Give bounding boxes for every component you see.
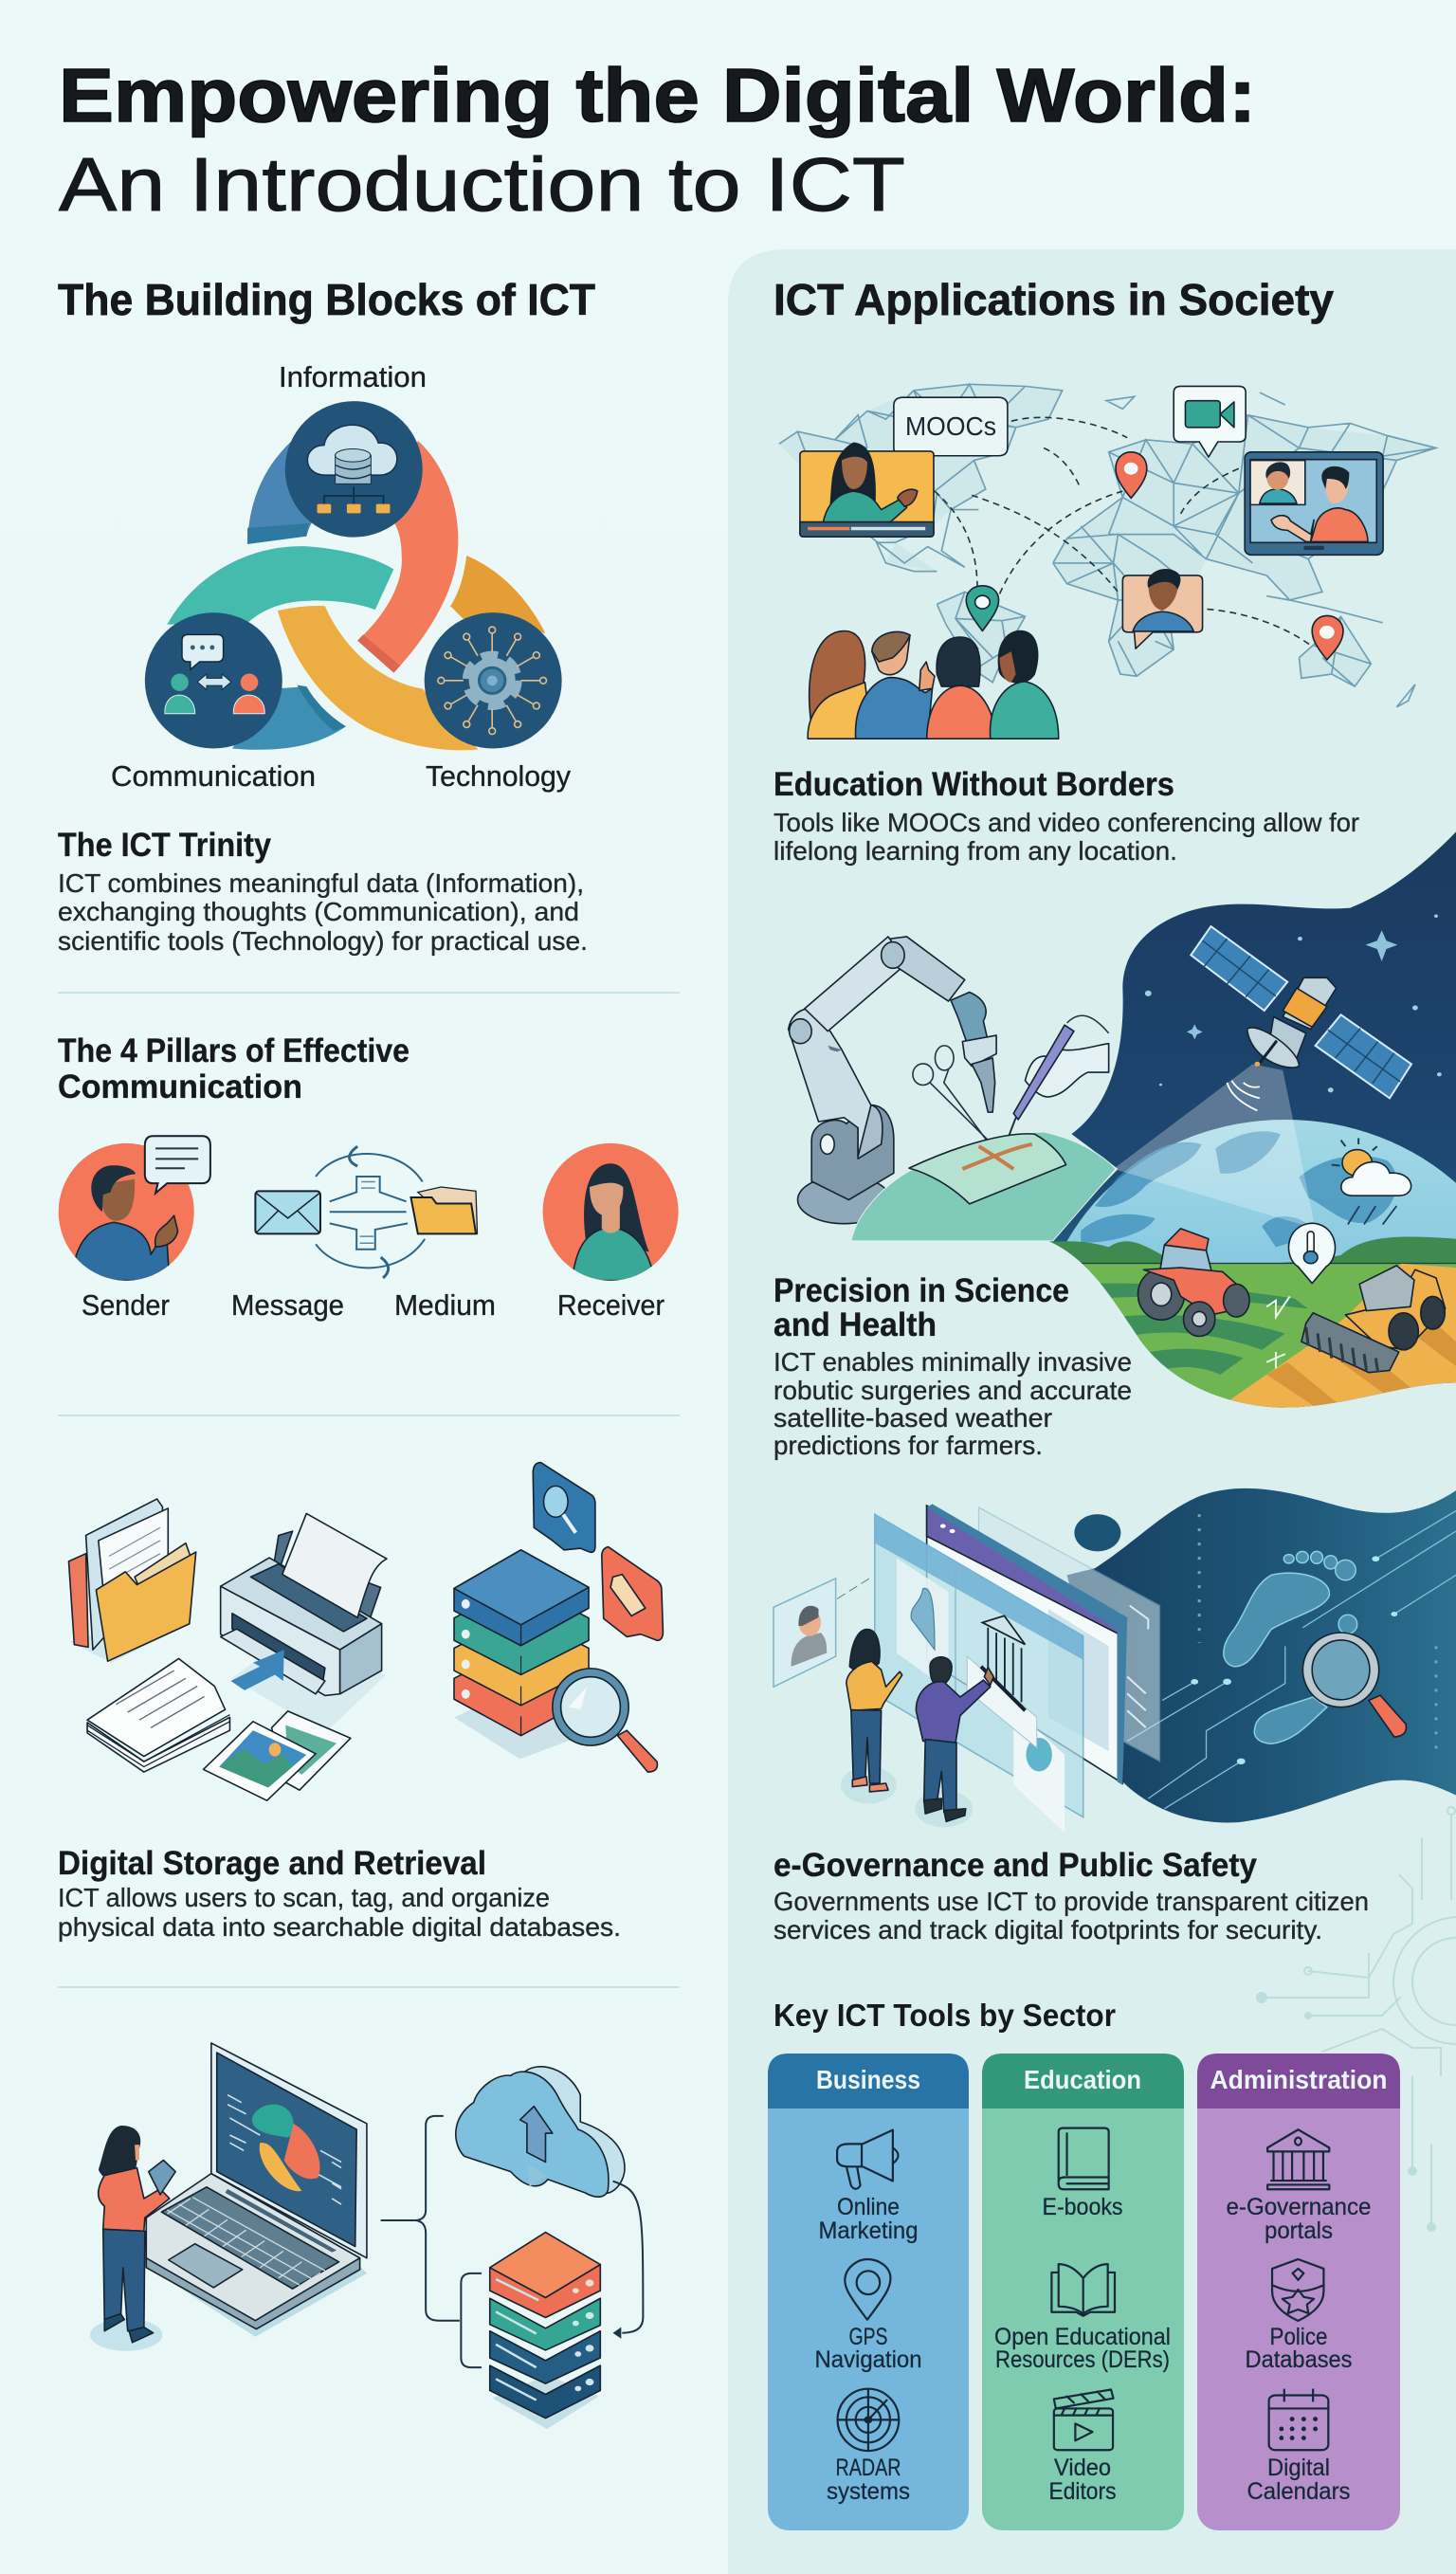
text block: precision in science and health: ICT enables minimally invasive (774, 1347, 1132, 1377)
decoration: stars (1187, 930, 1397, 1039)
card: Education: Resources (DERs) (995, 2346, 1170, 2373)
connector: bracket lines (381, 2116, 482, 2367)
label: MOOCs: MOOCs (905, 411, 996, 441)
icon: cloud upload (456, 2067, 625, 2197)
card: Administration: Calendars (1247, 2478, 1350, 2505)
card: Administration: Administration (1210, 2065, 1388, 2094)
labels: four pillars: Message (231, 1288, 344, 1322)
text block: digital storage: physical data into searchable digital databases. (58, 1912, 621, 1942)
icon: presenter bubble (1122, 569, 1203, 648)
icon: e-book (1059, 2128, 1109, 2189)
card: Administration (1197, 2054, 1400, 2530)
diagram: ICT trinity (145, 401, 562, 750)
text block: precision in science and health: Precision in Science (774, 1272, 1069, 1309)
illustration: education world map (779, 384, 1436, 739)
icon: location pins (966, 452, 1343, 660)
text block: precision in science and health: satellite-based weather (774, 1403, 1052, 1433)
icon: man (915, 1657, 993, 1827)
background blob: space, earth and farm (1048, 832, 1456, 1408)
labels: four pillars: Sender (82, 1288, 170, 1322)
heading: building blocks: The Building Blocks of ICT (58, 275, 595, 324)
icon: teacher screen (800, 442, 934, 537)
text block: ICT Trinity: exchanging thoughts (Communication), and (58, 897, 579, 926)
illustration: precision science and health (787, 832, 1456, 1408)
text block: education without borders: lifelong learning from any location. (774, 836, 1177, 866)
card: Administration: e-Governance (1227, 2194, 1371, 2220)
illustration: folders, printer, documents (68, 1499, 387, 1800)
icon: government building (981, 1616, 1025, 1710)
icon: open book (1051, 2264, 1115, 2316)
card: Administration: Police (1270, 2324, 1327, 2350)
card: Education: Editors (1048, 2478, 1117, 2505)
card: Business (768, 2054, 969, 2530)
card: Education: Video (1054, 2455, 1111, 2481)
labels: four pillars: Receiver (557, 1288, 664, 1322)
text block: ICT Trinity: ICT combines meaningful data (Information), (58, 868, 584, 898)
card: Administration: Databases (1246, 2346, 1352, 2373)
icon: thermometer pin (1288, 1223, 1336, 1284)
text block: precision in science and health (774, 1272, 1132, 1460)
text block: digital storage: ICT allows users to scan, tag, and organize (58, 1883, 550, 1912)
illustration: laptop, cloud and servers (90, 2043, 643, 2429)
illustration: e-governance and digital footprints (774, 1488, 1456, 1833)
label: Communication: Communication (111, 759, 316, 793)
icon: police shield (1272, 2259, 1323, 2321)
text block: e-governance and public safety: services and track digital footprints for security. (774, 1915, 1322, 1944)
icon: surgical scissors (913, 1046, 988, 1142)
chart: wireframe world map (779, 384, 1436, 707)
card: Business: systems (827, 2478, 910, 2505)
text block: ICT Trinity (58, 827, 588, 956)
icon: gloved hand with pen (1006, 1015, 1109, 1144)
card: Education (982, 2054, 1184, 2530)
text block: ICT Trinity: The ICT Trinity (58, 827, 271, 864)
icon: radar (838, 2389, 899, 2451)
text block: e-governance and public safety (774, 1847, 1369, 1944)
icon: receiver (543, 1143, 679, 1281)
icon: sender (59, 1136, 210, 1281)
panel: ICT applications background (728, 249, 1456, 2574)
heading: 4 pillars (58, 1032, 410, 1105)
labels: four pillars: Medium (394, 1288, 496, 1322)
icon: group of learners (808, 631, 1059, 739)
card: Education: Open Educational (994, 2324, 1171, 2350)
text block: digital storage: Digital Storage and Retrieval (58, 1845, 486, 1882)
heading: 4 pillars: Communication (58, 1068, 302, 1105)
card: Education: Education (1024, 2065, 1141, 2094)
card: Education: E-books (1043, 2194, 1122, 2220)
text block: e-governance and public safety: Governments use ICT to provide transparent citizen (774, 1887, 1369, 1916)
callout: MOOCs bubble (894, 397, 1008, 470)
text block: education without borders (774, 766, 1359, 866)
icon: browser windows (875, 1504, 1160, 1833)
icon: message and medium (255, 1146, 478, 1278)
icon: government portal (1267, 2129, 1329, 2189)
icon: GPS pin (845, 2259, 890, 2320)
icon: satellite (1191, 926, 1411, 1098)
text block: e-governance and public safety: e-Governance and Public Safety (774, 1847, 1257, 1884)
labels: four pillars (82, 1288, 664, 1322)
heading: key ICT tools: Key ICT Tools by Sector (774, 1998, 1116, 2033)
label: Information: Information (279, 360, 427, 393)
section: 4 pillars (58, 1032, 679, 1322)
icon: server stack (490, 2233, 600, 2429)
decoration: circuit gear (1257, 1807, 1456, 2231)
card: Business: Online (837, 2194, 900, 2220)
decoration: sensor signals (1266, 1296, 1290, 1368)
section: building blocks (58, 275, 595, 956)
text block: ICT Trinity: scientific tools (Technology) for practical use. (58, 926, 588, 956)
background blob: digital footprints (1067, 1488, 1456, 1822)
connector: cloud to servers arrow (613, 2182, 643, 2333)
text block: precision in science and health: and Health (774, 1306, 937, 1343)
woman and laptop (90, 2043, 367, 2351)
heading: ICT applications: ICT Applications in Society (774, 275, 1334, 324)
card: Business: Navigation (815, 2346, 921, 2373)
icon: weather (1332, 1138, 1411, 1225)
icon: video conference tablet (1245, 452, 1383, 555)
icon: two people talking (165, 634, 264, 714)
card: Business: RADAR (836, 2455, 901, 2481)
icon: harvester (1301, 1266, 1446, 1373)
section: ICT applications (768, 275, 1456, 2530)
card: Business: Business (816, 2065, 920, 2094)
text block: precision in science and health: robutic surgeries and accurate (774, 1376, 1132, 1405)
icon: footprints (1224, 1551, 1357, 1743)
icon: gear with circuits (438, 627, 546, 735)
card: Administration: portals (1265, 2218, 1333, 2244)
title: Empowering the Digital World: (59, 53, 1256, 137)
icon: woman (841, 1630, 902, 1803)
text block: education without borders: Tools like MOOCs and video conferencing allow for (774, 808, 1359, 837)
section: digital storage (58, 1463, 663, 1942)
title: An Introduction to ICT (59, 142, 905, 227)
icon: video call bubble (1174, 386, 1246, 457)
text block: precision in science and health: predictions for farmers. (774, 1431, 1043, 1460)
label: Technology: Technology (426, 759, 571, 793)
icon: megaphone (837, 2130, 899, 2189)
title (59, 53, 1256, 227)
icon: digital calendar (1269, 2389, 1328, 2450)
text block: education without borders: Education Without Borders (774, 766, 1174, 803)
icon: robot arm (789, 937, 996, 1224)
icon: citizen profile card (774, 1577, 872, 1687)
card: Administration: Digital (1267, 2455, 1330, 2481)
icon: video clapper (1054, 2389, 1114, 2450)
card: Business: GPS (849, 2324, 887, 2350)
icon: patient under drape (851, 1132, 1116, 1241)
icon: cloud database (307, 425, 397, 513)
icon: magnifying glass (1302, 1633, 1406, 1737)
icon: tractor (1138, 1229, 1249, 1336)
illustration: database stack and search (454, 1463, 663, 1772)
heading: 4 pillars: The 4 Pillars of Effective (58, 1032, 410, 1069)
card: Business: Marketing (819, 2218, 918, 2244)
text block: digital storage (58, 1845, 621, 1942)
